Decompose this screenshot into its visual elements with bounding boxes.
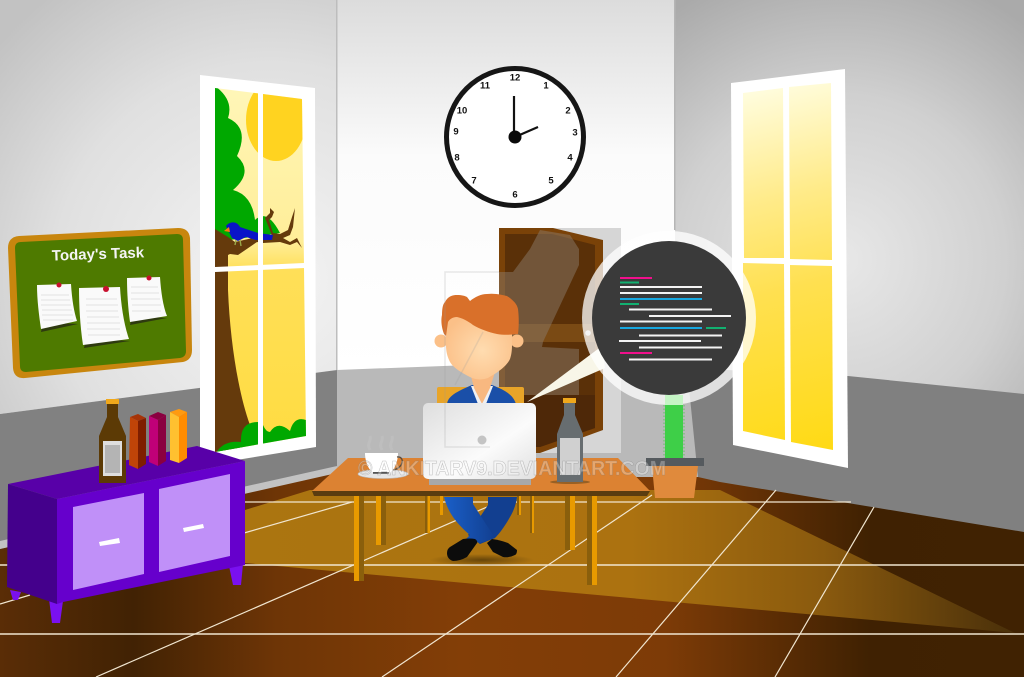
- code lines: [619, 278, 731, 360]
- window view: [215, 79, 307, 460]
- center wall: [337, 0, 676, 372]
- clock numbers: [453, 72, 578, 200]
- door inner panel: [505, 234, 595, 447]
- clock numbers: 2: [565, 106, 571, 116]
- door opening: [540, 228, 621, 453]
- clock numbers: 4: [567, 152, 573, 164]
- door handles: [99, 538, 120, 546]
- wall corner line right: [674, 0, 676, 230]
- laptop base: [429, 479, 531, 485]
- bottle on cabinet: [99, 399, 126, 483]
- tree trunk and branches: [215, 208, 302, 455]
- wall corner line left: [336, 0, 338, 370]
- developer: [430, 294, 534, 566]
- front right leg: [587, 496, 597, 585]
- left lower wall: [0, 370, 337, 549]
- plant: [646, 405, 704, 498]
- note 3: [127, 276, 167, 325]
- door light band: [505, 324, 595, 342]
- table: [312, 458, 650, 585]
- left window: [200, 75, 316, 466]
- stem: [665, 405, 683, 458]
- clock numbers: 8: [454, 152, 460, 164]
- bushes: [216, 419, 306, 452]
- ears: [434, 334, 448, 348]
- watermark outline: [445, 272, 499, 447]
- cabinet top: [8, 446, 245, 499]
- watermark: [358, 272, 666, 480]
- clock numbers: 5: [548, 176, 554, 186]
- board title: Today's Task: [52, 244, 145, 265]
- ring dot: [585, 330, 591, 336]
- bird: [224, 222, 273, 246]
- cabinet front leg: [49, 599, 63, 623]
- front left leg: [354, 496, 364, 581]
- door: [499, 228, 621, 453]
- clock numbers: 9: [453, 126, 459, 138]
- note 2: [79, 286, 130, 348]
- laptop lid: [423, 403, 536, 479]
- wall clock: [446, 68, 584, 206]
- clock numbers: 10: [457, 106, 467, 116]
- clock face: [446, 68, 584, 206]
- pot: [652, 466, 698, 498]
- right shoe: [487, 539, 517, 557]
- light beam on floor: [245, 490, 1015, 633]
- floor: [0, 468, 1024, 677]
- bubble tail: [527, 346, 605, 402]
- table top: [312, 458, 650, 491]
- cabinet: [7, 446, 245, 623]
- hair: [441, 294, 519, 336]
- cabinet front: [57, 461, 245, 604]
- pot rim: [646, 458, 704, 466]
- right wall: [675, 0, 1024, 395]
- stem serrated edges: [664, 405, 684, 458]
- clock hands: [514, 96, 538, 137]
- neck: [470, 372, 495, 404]
- steam: [369, 436, 392, 450]
- pants left leg: [444, 497, 495, 543]
- cabinet door left: [73, 493, 144, 590]
- stem behind ring: [665, 395, 683, 405]
- sky: [215, 88, 307, 453]
- table edge: [312, 491, 650, 496]
- watermark text: © ANKITARV9.DEVIANTART.COM: [358, 458, 666, 480]
- cabinet side: [7, 484, 57, 604]
- tree foliage: [215, 86, 280, 242]
- left wall: [0, 0, 338, 414]
- pants right leg: [468, 497, 517, 544]
- face: [446, 315, 512, 380]
- orange box: [129, 414, 146, 469]
- door leaf: [499, 228, 603, 453]
- bubble ring: [582, 231, 756, 405]
- center lower wall: [337, 365, 700, 477]
- board frame: [8, 228, 192, 378]
- bubble screen: [592, 241, 746, 395]
- floor grid lines: [0, 490, 1024, 677]
- door dark lower section: [505, 395, 595, 447]
- bottle on table: [550, 398, 590, 484]
- clock numbers: 12: [510, 72, 520, 84]
- notice board: [8, 228, 192, 378]
- chair back: [437, 387, 524, 417]
- sun: [246, 92, 302, 161]
- cabinet door right: [159, 474, 230, 572]
- door watermark sheen: [499, 230, 579, 395]
- window muntins: [258, 88, 263, 447]
- board surface: [15, 234, 186, 372]
- right lower wall: [687, 368, 1024, 532]
- right window: [731, 69, 848, 468]
- yellow box: [170, 409, 187, 463]
- magenta box: [149, 412, 166, 466]
- clock numbers: 3: [572, 128, 578, 138]
- window frame: [200, 75, 316, 466]
- shirt collar: [471, 386, 493, 404]
- coffee cup: [358, 436, 408, 478]
- clock numbers: 1: [543, 80, 549, 92]
- torso: [447, 385, 516, 440]
- speech bubble: [527, 231, 756, 405]
- left shoe: [447, 538, 477, 561]
- window panes: [743, 88, 784, 258]
- cabinet right leg: [229, 564, 243, 585]
- clock numbers: 7: [471, 176, 477, 186]
- table back legs: [376, 496, 575, 550]
- cabinet back leg: [10, 590, 21, 600]
- clock numbers: 6: [512, 190, 518, 200]
- window frame: [731, 69, 848, 468]
- laptop logo: [478, 436, 486, 444]
- clock numbers: 11: [480, 80, 491, 92]
- note 1: [37, 282, 78, 332]
- left baseboard: [0, 466, 337, 549]
- floor shadow: [430, 554, 534, 566]
- laptop: [423, 403, 536, 485]
